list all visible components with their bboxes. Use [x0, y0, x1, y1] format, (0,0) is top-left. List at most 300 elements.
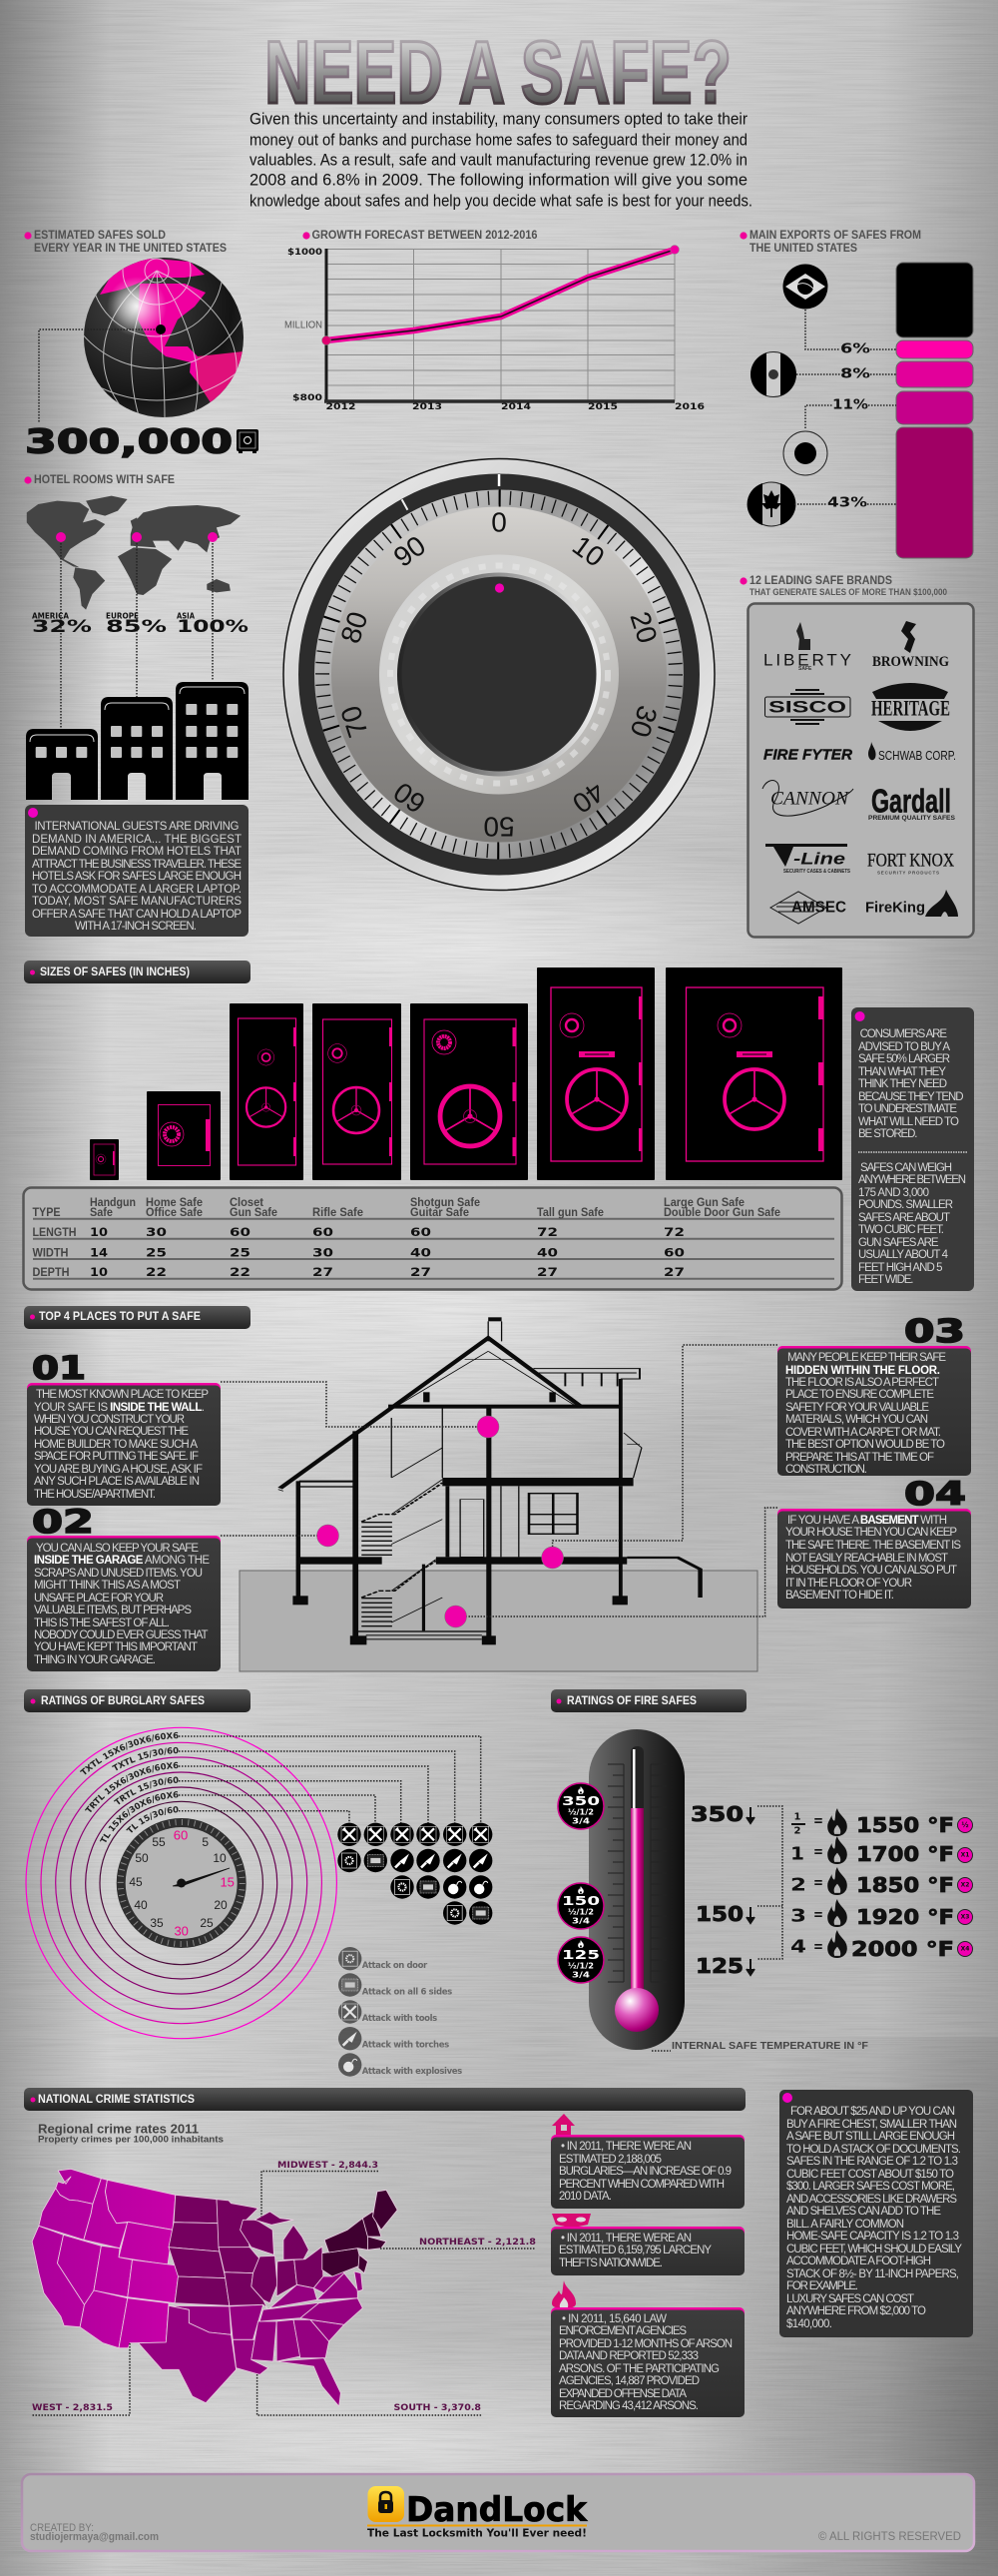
- region labels: [31, 2161, 536, 2415]
- icon: Japan flag: [783, 431, 827, 475]
- labels: 43%: [827, 495, 867, 511]
- map title: Property crimes per 100,000 inhabitants: [38, 2135, 224, 2145]
- sizes table: 27: [410, 1265, 431, 1279]
- rating row: 2 hours: 1850 °F: [856, 1873, 954, 1897]
- timer dial: [117, 1818, 247, 1948]
- step 03: MANY PEOPLE KEEP THEIR SAFE: [787, 1352, 946, 1364]
- section header: [551, 1689, 747, 1712]
- logo: Schwab Corp: [868, 742, 956, 763]
- step 01: YOU ARE BUYING A HOUSE, ASK IF: [34, 1464, 203, 1476]
- connectors: [221, 1345, 777, 1616]
- intro paragraph: [250, 110, 752, 210]
- logo: Sisco: [764, 690, 850, 724]
- line chart: $1000: [287, 248, 322, 258]
- text box: consumers advice: ADVISED TO BUY A: [858, 1041, 950, 1053]
- rating row: 1 hour: [790, 1836, 972, 1866]
- sizes table: Office Safe: [146, 1205, 203, 1219]
- callout: arson: REGARDING 43,412 ARSONS.: [559, 2400, 699, 2412]
- sizes table: 72: [537, 1225, 558, 1239]
- callout: arson: [551, 2307, 745, 2417]
- text box: consumers advice: THINK THEY NEED: [858, 1078, 947, 1090]
- combination dial: 0: [491, 507, 507, 537]
- icon: Canada flag: [748, 482, 795, 526]
- logo: Gardall: [868, 783, 955, 822]
- callout: fire chest costs: FOR ABOUT $25 AND UP YOU CAN: [790, 2106, 955, 2118]
- attack icon grid: [337, 1823, 492, 1925]
- panel: top 4 places: [24, 1306, 971, 1671]
- line chart: $800: [292, 393, 322, 403]
- safe: home/office: [147, 1091, 221, 1180]
- house cross-section: [278, 1317, 701, 1644]
- legend: Attack on door: [362, 1961, 428, 1971]
- step 03: THE BEST OPTION WOULD BE TO: [785, 1439, 945, 1451]
- timer dial: 5: [202, 1835, 209, 1849]
- step 01: ANY SUCH PLACE IS AVAILABLE IN: [34, 1476, 200, 1488]
- title: NEED A SAFE?: [264, 22, 732, 122]
- safe: tall gun: [537, 967, 655, 1180]
- step 02: 02: [32, 1503, 94, 1541]
- sizes table: Home Safe: [146, 1195, 203, 1209]
- sizes table: Rifle Safe: [312, 1205, 363, 1219]
- sizes table: LENGTH: [32, 1225, 76, 1239]
- legend: Attack with explosives: [362, 2067, 462, 2077]
- callout: larceny: • IN 2011, THERE WERE AN: [561, 2233, 692, 2245]
- safe: rifle: [312, 1003, 401, 1180]
- callout: arson: EXPANDED OFFENSE DATA: [559, 2388, 687, 2400]
- step 02: [27, 1503, 221, 1671]
- step 01: 01: [32, 1349, 86, 1387]
- badge: 125: ½/1/2: [568, 1961, 594, 1971]
- timer dial: 50: [135, 1851, 149, 1865]
- sizes table: 40: [537, 1246, 558, 1260]
- text box: consumers advice: USUALLY ABOUT 4: [858, 1249, 949, 1261]
- ring labels: TL 15X6/30X6/60X6: [100, 1791, 179, 1843]
- sizes table: 27: [312, 1265, 333, 1279]
- badge: 150: 150: [562, 1894, 600, 1908]
- stat: Asia: 100%: [177, 617, 249, 637]
- big number: 300,000: [25, 421, 233, 461]
- sizes table: Safe: [90, 1205, 113, 1219]
- step 03: COVER WITH A CARPET OR MAT.: [785, 1427, 941, 1439]
- legend: Attack on all 6 sides: [362, 1988, 452, 1998]
- region labels: NORTHEAST - 2,121.8: [419, 2238, 536, 2248]
- US map: [32, 2169, 397, 2406]
- step 01: SPACE FOR PUTTING THE SAFE. IF: [34, 1451, 199, 1463]
- callout: burglaries: ESTIMATED 2,188,005: [559, 2154, 662, 2166]
- rating row: 4 hours: =: [813, 1939, 823, 1955]
- step 02: YOU CAN ALSO KEEP YOUR SAFE: [36, 1543, 199, 1555]
- timer dial: 60: [174, 1827, 188, 1843]
- text box: international guests: DEMAND COMING FROM HOTELS THAT: [32, 846, 242, 858]
- text box: consumers advice: 175 AND 3,000: [858, 1187, 929, 1199]
- text box: consumers advice: TO UNDERESTIMATE: [858, 1103, 957, 1115]
- badge: 350: [558, 1783, 604, 1829]
- text box: international guests: TODAY, MOST SAFE MANUFACTURERS: [32, 896, 242, 908]
- rating row: 4 hours: 2000 °F: [851, 1937, 954, 1961]
- step 03: CONSTRUCTION.: [785, 1464, 867, 1476]
- badge: 350: 350: [562, 1794, 600, 1808]
- map title: [38, 2121, 224, 2145]
- text box: international guests: OFFER A SAFE THAT CAN HOLD A LAPTOP: [32, 909, 242, 921]
- timer dial: 35: [150, 1916, 164, 1930]
- callout: fire chest costs: A SAFE BUT STILL LARGE ENOUGH: [786, 2131, 955, 2143]
- step 03: 03: [904, 1312, 965, 1350]
- ring labels: TRTL 15/30/60: [114, 1777, 179, 1805]
- temperature labels: 350: [691, 1802, 744, 1826]
- sizes table: 30: [146, 1225, 167, 1239]
- callout: burglaries: [551, 2135, 745, 2209]
- rating row: 4 hours: 4: [790, 1937, 806, 1957]
- bracket: [757, 1806, 782, 1959]
- rating row: 3 hours: 1920 °F: [856, 1905, 954, 1929]
- section header: [24, 1306, 250, 1329]
- panel: ratings of burglary safes: [24, 1689, 493, 2077]
- rating row: 4 hours: X4: [961, 1945, 969, 1953]
- line chart: 2013: [412, 402, 442, 412]
- heading: estimated safes sold: EVERY YEAR IN THE UNITED STATES: [34, 243, 227, 255]
- logo: AMSEC: [770, 892, 846, 924]
- step 04: YOUR HOUSE THEN YOU CAN KEEP: [785, 1527, 957, 1539]
- credit: [30, 2522, 159, 2543]
- callout: arson: PROVIDED 1-12 MONTHS OF ARSON: [559, 2338, 733, 2350]
- logo: FireKing: [865, 890, 958, 917]
- stat: Europe: EUROPE: [106, 611, 139, 621]
- text box: consumers advice: POUNDS. SMALLER: [858, 1199, 953, 1211]
- callout: fire chest costs: $140,000.: [786, 2318, 832, 2330]
- icon: mask: [552, 2214, 591, 2227]
- heading: brands: 12 LEADING SAFE BRANDS: [749, 575, 892, 587]
- callout: arson: ARSONS. OF THE PARTICIPATING: [559, 2363, 720, 2375]
- sizes table: DEPTH: [32, 1265, 70, 1279]
- step 03: THE FLOOR IS ALSO A PERFECT: [785, 1377, 939, 1389]
- callout: fire chest costs: TO HOLD A STACK OF DOCUMENTS.: [786, 2144, 961, 2156]
- stat: Asia: ASIA: [177, 611, 195, 621]
- intro paragraph: money out of banks and purchase home safes to safeguard their money and: [250, 130, 748, 150]
- logo: Fort Knox: SECURITY PRODUCTS: [877, 871, 939, 875]
- logo: Gardall: Gardall: [871, 783, 951, 819]
- stat: America: 32%: [32, 617, 92, 637]
- icon: flame: [552, 2280, 576, 2308]
- stat: Europe: [106, 611, 167, 637]
- heading: main exports: [740, 230, 921, 255]
- callout: fire chest costs: LUXURY SAFES CAN COST: [786, 2293, 914, 2305]
- rating row: half hour: [791, 1808, 972, 1837]
- icon: house: [552, 2114, 575, 2135]
- text box: consumers advice: THAN WHAT THEY: [858, 1066, 946, 1078]
- callout: larceny: ESTIMATED 6,159,795 LARCENY: [559, 2245, 712, 2256]
- logo: V-Line: SECURITY CASES & CABINETS: [783, 869, 850, 875]
- line chart: [284, 246, 705, 412]
- badge: 125: [558, 1937, 604, 1983]
- sizes table: Double Door Gun Safe: [664, 1205, 780, 1219]
- panel: ratings of fire safes: [551, 1689, 972, 2052]
- sizes table: 60: [230, 1225, 250, 1239]
- step 01: WHEN YOU CONSTRUCT YOUR: [34, 1414, 185, 1426]
- sizes table: 60: [410, 1225, 431, 1239]
- stat: America: AMERICA: [32, 611, 69, 621]
- rating row: half hour: 1: [794, 1811, 801, 1823]
- step 03: MATERIALS, WHICH YOU CAN: [785, 1414, 928, 1426]
- text box: international guests: DEMAND IN AMERICA... THE BIGGEST: [32, 834, 242, 846]
- sizes table: 22: [230, 1265, 250, 1279]
- rating row: 3 hours: 3: [790, 1905, 806, 1927]
- callout: arson: • IN 2011, 15,640 LAW: [562, 2313, 667, 2325]
- step 04: [777, 1475, 971, 1609]
- text box: consumers advice: BECAUSE THEY TEND: [858, 1091, 964, 1103]
- sizes table: 60: [312, 1225, 333, 1239]
- callout: fire chest costs: ACCOMMODATE A FOOT-HIGH: [786, 2255, 931, 2267]
- safe: handgun: [90, 1139, 119, 1180]
- rating row: 4 hours: [790, 1930, 972, 1961]
- ground: [240, 1571, 757, 1671]
- text box: consumers advice: ANYWHERE BETWEEN: [858, 1174, 966, 1186]
- callout: arson: AGENCIES, 14,887 PROVIDED: [559, 2375, 700, 2387]
- callout: burglaries: PERCENT WHEN COMPARED WITH: [559, 2179, 725, 2191]
- text box: international guests: INTERNATIONAL GUESTS ARE DRIVING: [34, 821, 240, 833]
- legend: Attack with torches: [362, 2041, 449, 2051]
- text box: international guests: WITH A 17-INCH SCREEN.: [75, 921, 197, 933]
- sizes table: Tall gun Safe: [537, 1205, 604, 1219]
- logo: FireKing: FireKing: [865, 899, 925, 917]
- intro paragraph: knowledge about safes and help you decide what safe is best for your needs.: [250, 192, 752, 210]
- callout: arson: ENFORCEMENT AGENCIES: [559, 2325, 687, 2337]
- intro paragraph: 2008 and 6.8% in 2009. The following information will give you some: [250, 170, 748, 190]
- labels: 11%: [832, 397, 868, 413]
- callout: fire chest costs: CUBIC FEET, WHICH SHOULD EASILY: [786, 2244, 962, 2255]
- step 02: VALUABLE ITEMS, BUT PERHAPS: [34, 1605, 192, 1616]
- step 02: UNSAFE PLACE FOR YOUR: [34, 1593, 164, 1605]
- logo: Fort Knox: FORT KNOX: [867, 851, 954, 871]
- panel: growth forecast: [284, 230, 705, 412]
- rating row: 3 hours: X3: [961, 1913, 969, 1921]
- legend: [338, 1947, 462, 2077]
- connectors and pins: [56, 532, 218, 729]
- step 01: YOUR SAFE IS INSIDE THE WALL.: [34, 1402, 205, 1414]
- region labels: SOUTH - 3,370.8: [393, 2403, 481, 2413]
- step 04: BASEMENT TO HIDE IT.: [785, 1590, 894, 1602]
- rating row: 2 hours: 2: [790, 1875, 806, 1895]
- region labels: MIDWEST - 2,844.3: [277, 2161, 378, 2171]
- text box: consumers advice: SAFE 50% LARGER: [858, 1053, 950, 1065]
- section header: [24, 2088, 746, 2111]
- timer dial: 10: [213, 1851, 227, 1865]
- step 01: HOUSE YOU CAN REQUEST THE: [34, 1426, 189, 1438]
- credit: CREATED BY:: [30, 2522, 94, 2534]
- sizes table: 10: [90, 1265, 108, 1279]
- section header: [24, 1689, 250, 1712]
- step 04: HOUSEHOLDS. YOU CAN ALSO PUT: [785, 1565, 957, 1577]
- heading: estimated safes sold: ESTIMATED SAFES SOLD: [34, 230, 166, 242]
- step 02: THING IN YOUR GARAGE.: [34, 1654, 156, 1666]
- region labels: WEST - 2,831.5: [32, 2403, 113, 2413]
- sizes table: 25: [146, 1246, 167, 1260]
- step 02: INSIDE THE GARAGE AMONG THE: [34, 1555, 210, 1567]
- step 02: NOBODY COULD EVER GUESS THAT: [34, 1629, 208, 1641]
- heading: brands: [740, 575, 947, 597]
- callout: arson: DATA AND REPORTED 52,333: [559, 2350, 699, 2362]
- ring labels: TRTL 15X6/30X6/60X6: [85, 1761, 179, 1813]
- sizes table: 14: [90, 1246, 108, 1260]
- text box: consumers advice: CONSUMERS ARE: [860, 1028, 947, 1040]
- rating row: 1 hour: X1: [961, 1851, 969, 1859]
- text box: consumers advice: GUN SAFES ARE: [858, 1237, 939, 1249]
- step 03: [777, 1312, 971, 1476]
- sizes table: 30: [312, 1246, 333, 1260]
- step 02: YOU HAVE KEPT THIS IMPORTANT: [34, 1641, 198, 1653]
- panel: main exports: [740, 230, 973, 558]
- sizes table: 27: [537, 1265, 558, 1279]
- heading: brands: THAT GENERATE SALES OF MORE THAN $100,000: [749, 587, 947, 597]
- panel: 12 leading safe brands: [740, 575, 974, 937]
- callout: fire chest costs: STACK OF 8½- BY 11-INCH PAPERS,: [786, 2268, 959, 2280]
- line chart: MILLION: [284, 320, 322, 331]
- step 03: PLACE TO ENSURE COMPLETE: [785, 1389, 934, 1401]
- logo: AMSEC: AMSEC: [791, 899, 846, 917]
- panel: hotel rooms with safe: [24, 474, 249, 937]
- logo: DandLock: The Last Locksmith You'll Ever need!: [367, 2526, 587, 2540]
- legend: Attack with tools: [362, 2014, 437, 2024]
- stacked bar: [896, 263, 973, 558]
- step 03: HIDDEN WITHIN THE FLOOR.: [785, 1365, 940, 1377]
- thermometer: [589, 1729, 685, 2050]
- temperature labels: [691, 1802, 754, 1978]
- text box: consumers advice: SAFES CAN WEIGH: [860, 1162, 952, 1174]
- timer dial: 30: [174, 1923, 189, 1939]
- line chart: 2014: [501, 402, 531, 412]
- step 03: SAFETY FOR YOUR VALUABLE: [785, 1402, 929, 1414]
- sizes table: Large Gun Safe: [664, 1195, 745, 1209]
- text box: international guests: [25, 805, 249, 937]
- callout: fire chest costs: AND ACCESSORIES LIKE DRAWERS: [786, 2194, 957, 2206]
- logo panel: [748, 603, 974, 937]
- step 02: THIS IS THE SAFEST OF ALL.: [34, 1617, 170, 1629]
- badge: 350: 3/4: [572, 1817, 590, 1825]
- section header: RATINGS OF BURGLARY SAFES: [41, 1695, 205, 1707]
- step 04: THE SAFE THERE. THE BASEMENT IS: [785, 1540, 961, 1552]
- sizes table: 22: [146, 1265, 167, 1279]
- logo: Cannon: CANNON: [770, 789, 849, 809]
- timer dial: 20: [214, 1898, 228, 1912]
- logo: Liberty: LIBERTY: [763, 651, 851, 669]
- line chart: 2012: [325, 402, 356, 412]
- callout: burglaries: 2010 DATA.: [559, 2191, 612, 2203]
- badge: 125: 3/4: [572, 1971, 590, 1979]
- combination dial: 60: [388, 776, 431, 820]
- safe: closet gun: [230, 1003, 303, 1180]
- step 04: IT IN THE FLOOR OF YOUR: [785, 1578, 912, 1590]
- callout: fire chest costs: $300. LARGER SAFES COST MORE,: [786, 2181, 955, 2193]
- text box: consumers advice: SAFES ARE ABOUT: [858, 1212, 950, 1224]
- sizes table: TYPE: [32, 1205, 60, 1219]
- step 04: 04: [904, 1475, 966, 1513]
- logo: Liberty: SAFE: [798, 666, 812, 672]
- map title: Regional crime rates 2011: [38, 2121, 199, 2137]
- step 01: HOME BUILDER TO MAKE SUCH A: [34, 1439, 198, 1451]
- logo: Schwab Corp: SCHWAB CORP.: [878, 749, 956, 763]
- logo: Browning: BROWNING: [872, 654, 949, 670]
- rating row: 1 hour: 1: [790, 1843, 804, 1865]
- combination dial: 30: [624, 702, 664, 741]
- heading: main exports: MAIN EXPORTS OF SAFES FROM: [749, 230, 921, 242]
- icon: Mexico flag: [750, 351, 796, 397]
- sizes table: 60: [664, 1246, 685, 1260]
- text box: consumers advice: BE STORED.: [858, 1128, 918, 1140]
- section header: SIZES OF SAFES (IN INCHES): [40, 966, 190, 978]
- step 02: MIGHT THINK THIS AS A MOST: [34, 1580, 181, 1592]
- section header: RATINGS OF FIRE SAFES: [567, 1695, 697, 1707]
- rating row: 2 hours: =: [813, 1875, 823, 1891]
- callout: fire chest costs: AND SHELVES CAN ADD TO THE: [786, 2206, 941, 2218]
- badge: 150: ½/1/2: [568, 1907, 594, 1917]
- temperature labels: 125: [696, 1954, 744, 1978]
- step 04: IF YOU HAVE A BASEMENT WITH: [787, 1515, 947, 1527]
- step 03: PREPARE THIS AT THE TIME OF: [785, 1452, 934, 1464]
- sizes table: 40: [410, 1246, 431, 1260]
- ring labels: TXTL 15X6/30X6/60X6: [80, 1731, 179, 1775]
- connectors: [179, 1736, 481, 1823]
- text box: consumers advice: TWO CUBIC FEET.: [858, 1224, 944, 1236]
- sizes table: Handgun: [90, 1195, 136, 1209]
- intro paragraph: Given this uncertainty and instability, many consumers opted to take their: [250, 110, 748, 128]
- callout: fire chest costs: CUBIC FEET COST ABOUT $150 TO: [786, 2169, 954, 2181]
- logo: Liberty: [763, 622, 851, 672]
- callout: fire chest costs: SAFES IN THE RANGE OF 1.2 TO 1.3: [786, 2156, 958, 2168]
- rating row: half hour: 2: [794, 1825, 801, 1837]
- icon: globe: [84, 258, 244, 417]
- safe: large double door: [666, 967, 842, 1180]
- rating row: half hour: 1550 °F: [856, 1813, 954, 1837]
- labels: [794, 310, 896, 511]
- line chart: 2016: [675, 402, 705, 412]
- logo: Cannon: [762, 781, 853, 816]
- combination dial: [283, 459, 715, 891]
- step 04: NOT EASILY REACHABLE IN MOST: [785, 1553, 948, 1565]
- combination dial: 10: [567, 529, 610, 573]
- step 02: SCRAPS AND UNUSED ITEMS. YOU: [34, 1568, 203, 1580]
- text box: consumers advice: FEET HIGH AND 5: [858, 1262, 942, 1274]
- rating row: half hour: =: [813, 1813, 823, 1829]
- ring labels: TL 15/30/60: [126, 1806, 178, 1833]
- temperature labels: 150: [696, 1902, 744, 1926]
- section header: TOP 4 PLACES TO PUT A SAFE: [39, 1311, 201, 1323]
- safe: shotgun/guitar: [410, 1003, 528, 1180]
- heading: main exports: THE UNITED STATES: [749, 243, 857, 255]
- badge: 150: 3/4: [572, 1917, 590, 1925]
- step 01: THE HOUSE/APARTMENT.: [34, 1489, 156, 1501]
- logo: V-Line: -Line: [793, 849, 845, 869]
- rating row: 2 hours: X2: [961, 1881, 969, 1889]
- text box: international guests: TO ACCOMMODATE A LARGER LAPTOP.: [32, 884, 242, 896]
- sizes table: WIDTH: [32, 1246, 68, 1260]
- logo: DandLock: [367, 2486, 588, 2540]
- logo: DandLock: DandLock: [406, 2490, 588, 2530]
- rating row: 1 hour: 1700 °F: [856, 1842, 954, 1866]
- step 01: [27, 1349, 221, 1506]
- sizes table: Guitar Safe: [410, 1205, 469, 1219]
- callout: burglaries: BURGLARIES—AN INCREASE OF 0.9: [559, 2166, 732, 2178]
- callout: fire chest costs: ANYWHERE FROM $2,000 TO: [786, 2305, 926, 2317]
- labels: 6%: [840, 341, 870, 357]
- sizes table: 10: [90, 1225, 108, 1239]
- badge: 125: 125: [562, 1948, 600, 1962]
- line chart: 2015: [588, 402, 618, 412]
- rating row: 3 hours: =: [813, 1907, 823, 1923]
- icon: hotel buildings: [26, 682, 249, 800]
- combination dial: 50: [483, 811, 515, 843]
- text box: international guests: HOTELS ASK FOR SAFES LARGE ENOUGH: [32, 871, 242, 883]
- logo: Fire Fyter: FIRE FYTER: [763, 747, 852, 763]
- section header: [24, 961, 250, 983]
